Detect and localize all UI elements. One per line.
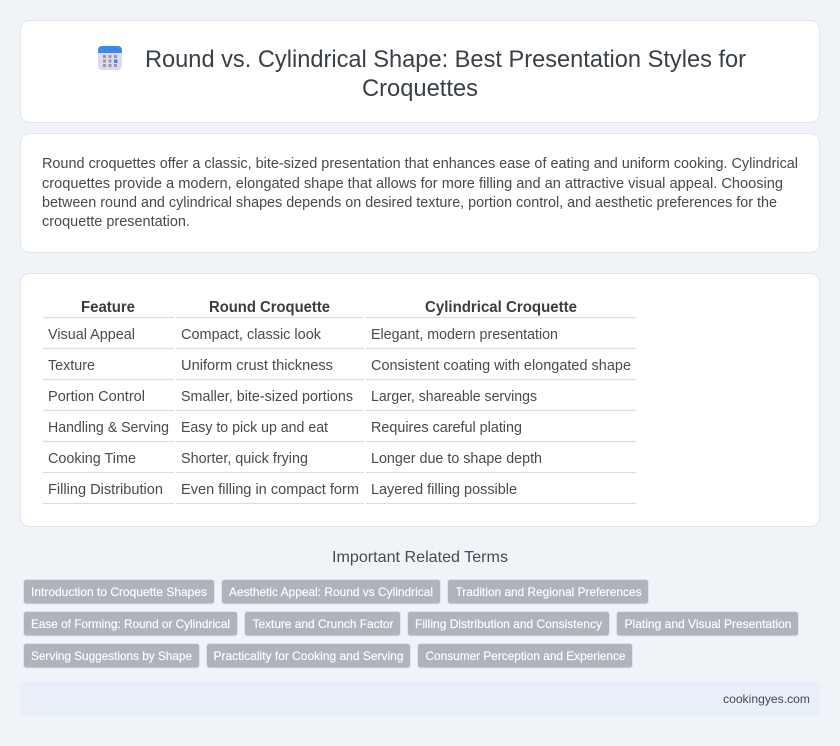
- table row: filling distribution: Filling Distribution: [48, 482, 163, 498]
- table row: handling and serving: [43, 420, 636, 442]
- heading: title text: Round vs. Cylindrical Shape: Best Presentation Styles for: [145, 46, 746, 73]
- table row: cooking time: Longer due to shape depth: [371, 451, 542, 467]
- table row: cooking time: Cooking Time: [48, 451, 136, 467]
- heading: title text: Croquettes: [362, 75, 478, 102]
- tag: Aesthetic Appeal: Round vs Cylindrical: [229, 585, 433, 599]
- icon: calendar: [98, 46, 122, 70]
- tag: Texture and Crunch Factor: [252, 617, 394, 631]
- table row: visual appeal: Visual Appeal: [48, 327, 135, 343]
- tag: [408, 612, 610, 636]
- tag: Tradition and Regional Preferences: [456, 585, 642, 599]
- table header: Cylindrical Croquette: [425, 299, 577, 316]
- table row: cooking time: [43, 451, 636, 472]
- tag: [24, 612, 238, 636]
- panel: comparison table: [20, 274, 820, 526]
- table row: filling distribution: Even filling in compact form: [181, 482, 359, 498]
- table row: texture: Uniform crust thickness: [181, 358, 333, 374]
- tag: [222, 580, 440, 604]
- table row: texture: Consistent coating with elongated shape: [371, 358, 631, 374]
- tag: [616, 612, 798, 636]
- tag: Ease of Forming: Round or Cylindrical: [31, 617, 230, 631]
- table row: filling distribution: Layered filling possible: [371, 482, 517, 498]
- panel: introduction: [20, 134, 820, 252]
- table row: cooking time: Shorter, quick frying: [181, 451, 308, 467]
- text block: introduction paragraph: croquette presentation.: [42, 214, 190, 230]
- table row: handling and serving: Easy to pick up and eat: [181, 420, 328, 436]
- table row: portion control: Smaller, bite-sized portions: [181, 389, 353, 405]
- tag: Introduction to Croquette Shapes: [31, 585, 207, 599]
- heading: important related terms: Important Related Terms: [332, 549, 508, 566]
- table row: handling and serving: Requires careful plating: [371, 420, 522, 436]
- tag: Consumer Perception and Experience: [426, 649, 626, 663]
- table row: handling and serving: Handling & Serving: [48, 420, 169, 436]
- tag: [448, 580, 648, 604]
- heading: title text: [145, 46, 746, 102]
- tag: [206, 644, 410, 668]
- table header: [43, 299, 636, 318]
- tag: Filling Distribution and Consistency: [415, 617, 602, 631]
- tag: [24, 644, 200, 668]
- tags: related terms: [24, 580, 798, 668]
- table row: filling distribution: [43, 482, 636, 504]
- table row: visual appeal: [43, 327, 636, 348]
- table row: visual appeal: Compact, classic look: [181, 327, 322, 343]
- tag: Plating and Visual Presentation: [624, 617, 792, 631]
- table row: texture: [43, 358, 636, 380]
- footer: cookingyes.com: [723, 692, 810, 706]
- text block: introduction paragraph: croquettes provide a modern, elongated shape that allows for more filling and an attractive visual appeal. Choosing: [42, 176, 783, 192]
- tag: [418, 644, 632, 668]
- tag: Serving Suggestions by Shape: [31, 649, 192, 663]
- table row: texture: Texture: [48, 358, 95, 374]
- table row: portion control: Larger, shareable servings: [371, 389, 537, 405]
- panel: title: [20, 20, 820, 122]
- footer: [20, 682, 820, 716]
- tag: [24, 580, 214, 604]
- table row: portion control: [43, 389, 636, 410]
- tag: [244, 612, 400, 636]
- text block: introduction paragraph: Round croquettes offer a classic, bite-sized presentation that enhances ease of eating and uniform cooking. Cylindrical: [42, 156, 798, 172]
- table row: portion control: Portion Control: [48, 389, 145, 405]
- text block: introduction paragraph: between round and cylindrical shapes depends on desired texture, portion control, and aesthetic preferences for the: [42, 195, 777, 211]
- table header: Feature: [81, 299, 135, 316]
- tag: Practicality for Cooking and Serving: [214, 649, 404, 663]
- text block: introduction paragraph: [42, 156, 798, 230]
- table header: Round Croquette: [209, 299, 330, 316]
- table row: visual appeal: Elegant, modern presentation: [371, 327, 558, 343]
